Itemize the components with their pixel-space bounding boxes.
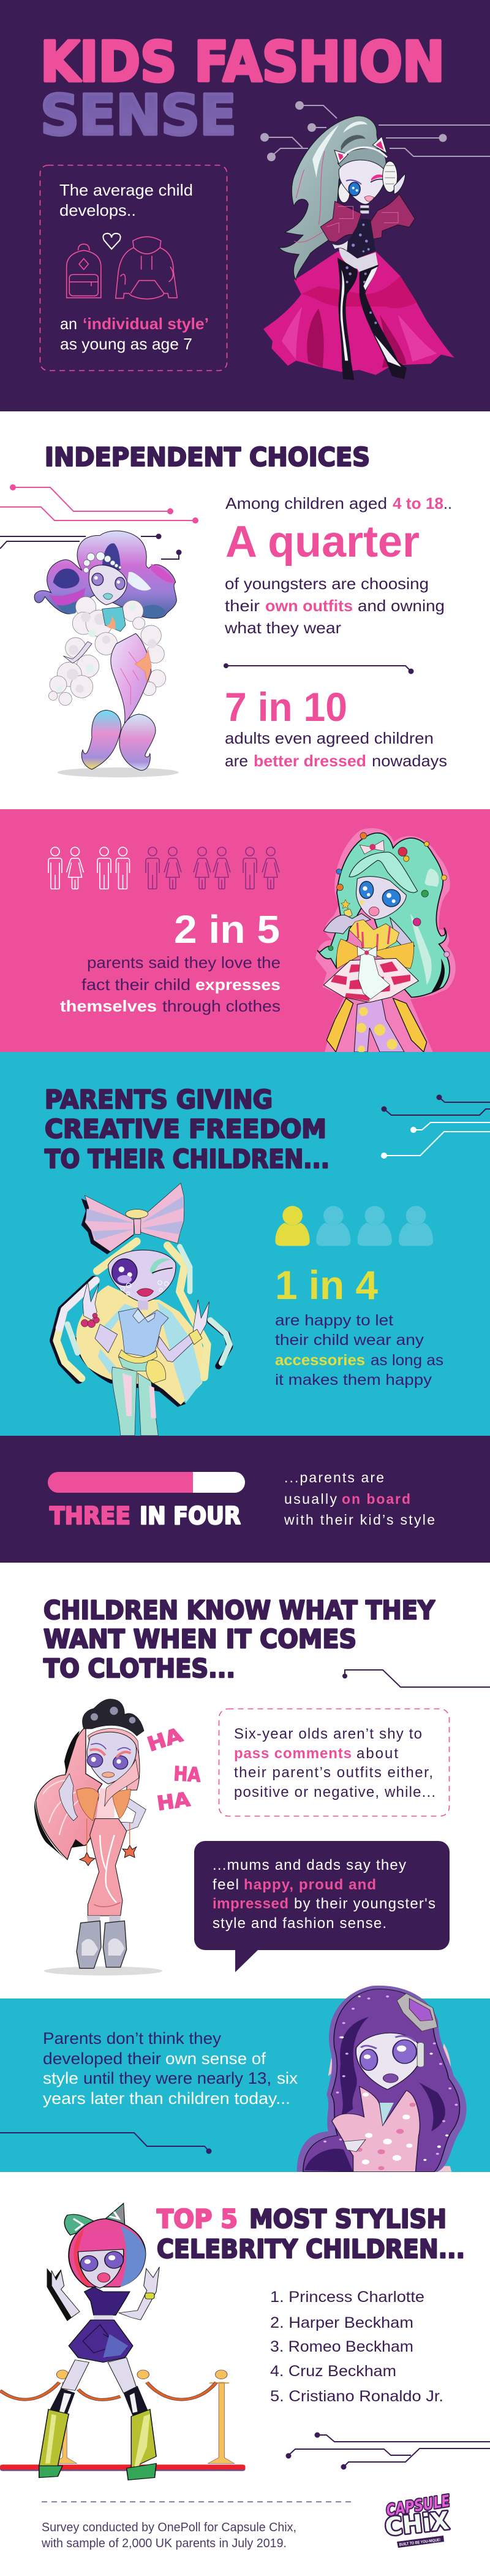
tassels <box>80 1845 137 1865</box>
panel: creative freedom <box>0 1052 490 1436</box>
speech bubble: mums and dads: style and fashion sense. <box>213 1915 386 1932</box>
text: on board: on board <box>342 1491 410 1507</box>
text: among children: 4 to 18 <box>393 494 443 513</box>
hair <box>69 2219 145 2287</box>
red carpet and rope barrier <box>0 2370 246 2471</box>
heading: TOP 5 <box>157 2204 238 2234</box>
crown <box>83 1699 144 1736</box>
face <box>78 2249 124 2288</box>
circuit lines dark <box>0 533 181 559</box>
fur bolero <box>77 1788 99 1821</box>
speech bubble: mums and dads: feel <box>213 1877 239 1893</box>
text: accessories <box>275 1312 443 1389</box>
text: expresses themselves: themselves <box>60 997 157 1015</box>
soles <box>39 2463 156 2480</box>
text: expresses themselves: parents said they love the <box>87 953 281 972</box>
source note: Survey conducted by OnePoll for Capsule Chix, <box>42 2521 296 2534</box>
boots <box>87 1916 121 1923</box>
skirt <box>69 2320 133 2362</box>
head <box>338 148 386 170</box>
boots <box>337 257 358 380</box>
text: on board <box>284 1469 435 1528</box>
bangs <box>349 852 418 893</box>
logo: capsule chix <box>383 2492 451 2548</box>
top <box>96 1788 115 1820</box>
list: top five: 2. Harper Beckham <box>270 2314 413 2331</box>
heading <box>157 2204 465 2264</box>
text: parents thirteen: own sense of <box>165 2049 266 2068</box>
top <box>85 2287 130 2315</box>
shorts and belt <box>118 1356 153 1371</box>
callout text: average child: The average child <box>59 181 193 199</box>
heading <box>43 1595 435 1683</box>
text: accessories: as long as <box>371 1352 443 1369</box>
bow <box>64 2203 125 2235</box>
text: among children: Among children aged <box>225 494 387 513</box>
title: KIDS FASHION <box>40 30 445 94</box>
list: top five: 4. Cruz Beckham <box>270 2363 396 2380</box>
text: youngsters: own outfits <box>265 596 353 615</box>
callout: six-year olds: their parent’s outfits either, <box>234 1764 433 1781</box>
text: parents thirteen <box>43 2029 298 2108</box>
text: parents thirteen: Parents don’t think they <box>43 2029 222 2048</box>
pants <box>88 1819 127 1916</box>
list: top five: 5. Cristiano Ronaldo Jr. <box>270 2388 443 2405</box>
callout: individual style <box>40 166 227 370</box>
text: individual style: an <box>60 314 77 333</box>
tail <box>111 633 151 723</box>
face <box>356 2033 421 2089</box>
legs <box>61 2358 137 2393</box>
icon: people 1 in 4 <box>275 1206 433 1246</box>
star and cuff <box>341 899 350 909</box>
callout text: develops: develops.. <box>59 201 136 219</box>
text: on board: ...parents are <box>284 1469 384 1485</box>
hair bow <box>360 840 384 854</box>
panel: independent choices <box>0 411 490 809</box>
text: parents thirteen: until they were nearly 13, <box>83 2069 271 2087</box>
character: mint hair girl <box>315 828 456 1053</box>
hair <box>317 833 450 997</box>
logo: capsule chix: BUILT TO BE YOU-NIQUE! <box>399 2538 441 2547</box>
shell <box>146 1360 166 1384</box>
braids <box>54 1241 230 1379</box>
neck <box>138 1301 148 1310</box>
circuit line <box>342 1670 490 1687</box>
text: expresses themselves: expresses <box>195 975 281 994</box>
hands <box>83 1281 99 1320</box>
title <box>40 30 445 148</box>
arms <box>95 1324 118 1353</box>
icon: backpack <box>67 244 101 298</box>
text: accessories: their child wear any <box>275 1332 424 1349</box>
text: adults agreed: adults even agreed children <box>225 729 434 747</box>
speech bubble: mums and dads: ...mums and dads say they <box>213 1857 406 1873</box>
stat: 1 in 4: 1 in 4 <box>275 1262 378 1308</box>
text: expresses themselves: fact their child <box>81 975 190 994</box>
cape shadow <box>74 1336 186 1407</box>
shadow <box>58 768 179 777</box>
heading: CELEBRITY CHILDREN... <box>157 2234 465 2264</box>
skirt <box>323 958 418 1002</box>
stat: 7 in 10: 7 in 10 <box>225 684 347 730</box>
character: bow girl with braids <box>54 1183 230 1436</box>
heading <box>45 1084 330 1174</box>
ponytail hair <box>279 116 380 280</box>
foam boa <box>48 596 166 706</box>
text: accessories: it makes them happy <box>275 1371 432 1389</box>
posts <box>51 2382 235 2463</box>
legs <box>354 999 404 1052</box>
pink parting <box>88 1728 139 1753</box>
arms and hands <box>47 2268 78 2321</box>
legs <box>112 1367 137 1436</box>
text: parents thirteen: years later than children today... <box>43 2089 290 2108</box>
progress bar <box>48 1472 245 1493</box>
bodice <box>349 920 399 956</box>
list: top five: 1. Princess Charlotte <box>270 2288 424 2306</box>
stat: 2 in 5: 2 in 5 <box>174 907 280 951</box>
skirt <box>263 251 454 375</box>
text: youngsters: what they wear <box>224 619 341 637</box>
callout: six-year olds: pass comments <box>234 1745 352 1762</box>
text: expresses themselves <box>60 953 281 1015</box>
bodice <box>347 219 375 259</box>
circuit lines pink <box>0 484 198 524</box>
sticker outline <box>297 1986 466 2172</box>
hair <box>303 1989 459 2172</box>
logo: capsule chix: CHiX <box>383 2507 451 2542</box>
pictogram: people <box>48 847 279 889</box>
shadow <box>44 1967 162 1975</box>
arms <box>323 913 371 934</box>
arm <box>63 642 92 663</box>
text: individual style: ‘individual style’ <box>83 314 209 333</box>
divider circuit <box>224 663 414 674</box>
pearls <box>83 552 121 573</box>
character: headphone girl in pink gown <box>263 116 454 380</box>
text: accessories: accessories <box>275 1352 365 1369</box>
text: adults agreed: nowadays <box>372 752 447 770</box>
heading: TO CLOTHES... <box>43 1653 235 1683</box>
sticker outline <box>315 828 456 1052</box>
beads <box>328 833 450 957</box>
text: parents thirteen: six <box>277 2069 298 2087</box>
text: HA HA HA <box>145 1723 202 1815</box>
text: on board: usually <box>284 1491 337 1507</box>
speech bubble: mums and dads: by their youngster's <box>294 1896 435 1912</box>
text: HA HA HA: HA <box>173 1762 202 1786</box>
text: HA HA HA: HA <box>156 1788 192 1815</box>
title: SENSE <box>40 83 236 148</box>
jewel <box>397 1994 437 2031</box>
text: adults agreed <box>225 729 447 770</box>
carpet <box>0 2464 246 2471</box>
heading: three in four: THREE <box>50 1503 130 1530</box>
text: youngsters <box>224 574 445 637</box>
circuit line <box>0 2133 212 2154</box>
top <box>102 607 126 631</box>
stars <box>135 650 151 682</box>
text: youngsters: and owning <box>358 596 445 615</box>
text: on board: with their kid’s style <box>284 1512 435 1528</box>
character: mermaid <box>34 531 179 777</box>
source note <box>41 2521 296 2550</box>
heading: WANT WHEN IT COMES <box>43 1624 356 1654</box>
circuit lines <box>381 1095 490 1159</box>
face <box>87 1732 137 1784</box>
callout: six-year olds: about <box>356 1745 398 1762</box>
text: youngsters: their <box>225 596 260 615</box>
arm right <box>115 1798 146 1831</box>
fins <box>81 710 121 769</box>
text: youngsters: of youngsters are choosing <box>225 574 429 593</box>
character: red carpet girl <box>39 2203 159 2480</box>
circuit lines <box>260 101 490 161</box>
panel: 2 in 5 <box>0 809 490 1053</box>
icon: hoodie <box>116 237 177 299</box>
callout: six-year olds: positive or negative, while... <box>234 1784 435 1801</box>
text: parents thirteen: style <box>43 2069 78 2087</box>
boots <box>39 2409 156 2468</box>
character: purple glitter hair girl <box>297 1986 466 2172</box>
panel: three in four <box>0 1436 490 1563</box>
face <box>356 877 406 920</box>
ropes <box>0 2382 216 2399</box>
thigh skin <box>339 247 378 273</box>
circuit lines <box>285 2433 490 2469</box>
heading: INDEPENDENT CHOICES <box>45 442 370 472</box>
heading: MOST STYLISH <box>249 2204 447 2234</box>
face <box>108 1250 176 1303</box>
speech bubble: mums and dads: impressed <box>213 1896 288 1912</box>
source note: with sample of 2,000 UK parents in July 2019. <box>41 2537 287 2550</box>
text: accessories: are happy to let <box>275 1312 393 1329</box>
list: top five: 3. Romeo Beckham <box>270 2338 413 2355</box>
big yellow bow <box>336 939 360 969</box>
icon: heart <box>103 234 121 249</box>
face <box>89 565 127 605</box>
heading: TO THEIR CHILDREN... <box>45 1144 330 1174</box>
long hair <box>36 1727 102 1859</box>
heading: three in four: IN FOUR <box>140 1503 241 1530</box>
callout: six-year olds <box>219 1709 450 1816</box>
ear behind <box>328 2043 451 2172</box>
arm left <box>59 1774 78 1821</box>
heading: CHILDREN KNOW WHAT THEY <box>43 1595 435 1625</box>
stat: a quarter: A quarter <box>225 517 420 566</box>
text: parents thirteen: developed their <box>43 2049 161 2068</box>
text: adults agreed: better dressed <box>254 752 366 770</box>
dress <box>332 2086 420 2172</box>
shirt <box>118 1308 168 1357</box>
panel: own sense of style <box>0 1986 490 2172</box>
panel: top 5 celebrity children <box>0 2172 490 2576</box>
jacket <box>320 201 361 242</box>
heading: CREATIVE FREEDOM <box>45 1114 326 1144</box>
beads and cuff <box>81 1313 99 1328</box>
logo: capsule chix: CAPSULE <box>385 2492 451 2520</box>
text: among children: .. <box>443 494 452 513</box>
heading: PARENTS GIVING <box>45 1084 273 1115</box>
list: top five <box>270 2288 443 2405</box>
text: young as age 7: as young as age 7 <box>60 335 192 353</box>
dashed separator <box>42 2501 355 2502</box>
text: expresses themselves: through clothes <box>162 997 281 1015</box>
character: pink hair girl <box>34 1699 162 1975</box>
panel: children know <box>0 1563 490 1999</box>
mermaid hair <box>34 531 176 619</box>
text: adults agreed: are <box>225 752 248 770</box>
callout: six-year olds: Six-year olds aren’t shy to <box>234 1726 422 1742</box>
white ribbon <box>358 948 390 999</box>
hair cape <box>77 1286 206 1405</box>
speech bubble: mums and dads: happy, proud and <box>244 1877 376 1893</box>
front hair strand <box>105 1759 139 1807</box>
bow <box>81 1198 134 1254</box>
speech bubble: mums and dads <box>194 1841 450 1972</box>
ribbons <box>326 998 353 1052</box>
text: HA HA HA: HA <box>145 1723 186 1756</box>
